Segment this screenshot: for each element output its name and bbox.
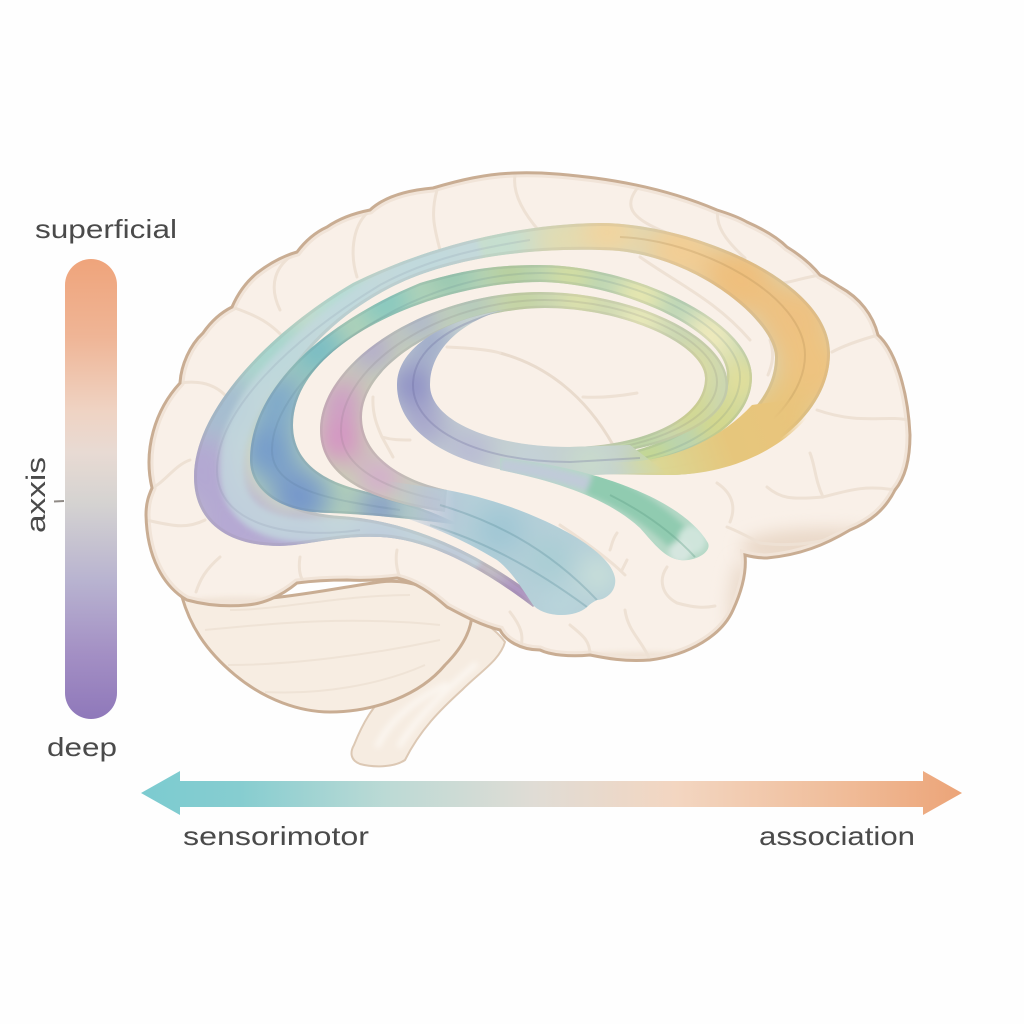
label: sensorimotor: sensorimotor: [183, 821, 369, 851]
band: blue teal yellow: [250, 265, 752, 524]
band: lower fan tips: [402, 484, 616, 615]
vertical axis: superficial to deep: [21, 214, 177, 762]
axis tick: [54, 500, 64, 502]
band: green tail: [500, 458, 709, 560]
cerebral cortex: [146, 173, 910, 668]
gradient double arrow: [141, 771, 962, 815]
label: deep: deep: [47, 732, 117, 762]
pale inner strand: [232, 248, 480, 565]
band: gold lower overlap: [600, 395, 822, 475]
brain illustration: [146, 173, 910, 766]
label: superficial: superficial: [35, 214, 177, 244]
cerebellum: [182, 581, 472, 712]
gradient bar: [65, 259, 117, 719]
label: association: association: [759, 821, 915, 851]
horizontal arrow axis: [141, 771, 962, 851]
band: magenta yellow: [320, 292, 728, 512]
sulci: [146, 175, 908, 660]
band: deep purple ring: [397, 310, 654, 475]
brainstem: [352, 618, 505, 766]
band: outer purple teal gold: [194, 223, 830, 607]
label: axxis: axxis: [21, 457, 51, 533]
